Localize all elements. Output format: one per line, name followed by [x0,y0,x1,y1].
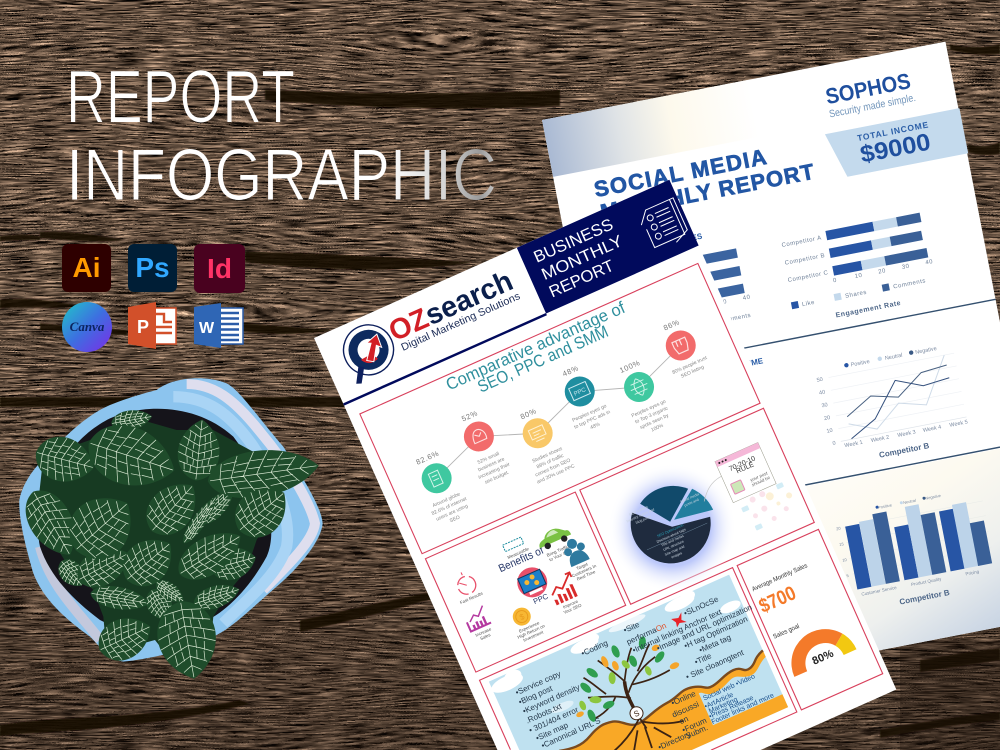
icon: car: to Your Site [548,548,571,562]
bar chart: competitor b: 10 [842,557,848,563]
blue pot [19,378,323,662]
bar chart: competitor b: Competitor B [899,588,951,607]
icon: photoshop [128,244,177,292]
stacked bar chart: competitor engagement: Comments [893,278,926,290]
step 1: SEO [449,514,461,524]
list: on page left: •Service copy [514,669,562,697]
title: report infographic: INFOGRAPHIC [66,135,497,216]
pie chart: Social media [679,492,700,504]
panel: average monthly sales: Sales goal [772,623,801,641]
foliage mass [37,417,287,667]
step 4: 48% [589,421,602,431]
step 4: 48% [561,363,580,379]
stacked bar chart: competitor engagement: 0 [833,278,838,284]
step 3: Studies shows [531,446,564,465]
stacked bar chart: competitor engagement: Like [802,300,816,308]
step 5 [611,355,676,438]
step 1: 82.6% of internet [431,496,468,517]
list: off page: Marketing [708,696,739,715]
icon: word: W [199,320,215,337]
panel: average monthly sales [737,529,883,710]
header gradient band [542,80,759,177]
step 1: 82.6% [415,449,440,467]
line chart: competitor b: 40 [819,390,826,397]
stacked bar chart: competitor engagement: 20 [878,268,887,276]
line chart: competitor b: Week 4 [922,425,942,434]
card: 70-20-10 rule: RULE [735,461,756,475]
icon: fast results: Fast Results [459,590,484,605]
logo: ozsearch [336,262,526,386]
total income panel: TOTAL INCOME [856,119,929,143]
list: on page right: •Title [693,651,713,667]
bar chart: competitor b: Positive [878,502,893,510]
stacked bar chart: competitor engagement: Competitor A [781,235,822,249]
stacked bar chart: competitor engagement: 30 [901,264,910,271]
list: on page left: •Site map [534,720,570,743]
line chart: competitor b: Neutral [884,353,903,362]
line chart: competitor b: Week 1 [844,440,863,449]
step 5: spots seen by [639,413,670,431]
pie chart: Site map and [664,545,685,557]
card: 70-20-10 rule: your post [749,470,769,483]
pie chart [602,455,742,594]
list: on page left [511,662,602,750]
pie chart: URL structure [663,539,684,552]
step 2: 52% small [477,451,500,466]
gauge: 80% [781,618,857,677]
list: off page: •Forum [681,716,708,735]
stacked bar chart: competitor engagement: Competitor C [787,270,829,284]
section heading: time: SENTIMENT OVER TIME [671,356,765,383]
list: on page left: • 301/404 error [528,705,580,735]
banner [314,180,699,406]
tree [556,624,706,750]
pot soil [38,409,271,632]
step 2: 52% [460,408,479,423]
step 1: Around globe [432,491,461,509]
list: off page [642,660,777,750]
total income panel: $9000 [858,129,933,169]
heading: Benefits of [497,544,546,575]
stacked bar chart: competitor engagement: 40 [925,259,934,266]
pie chart: SEO Optimization [656,523,684,538]
ground [556,650,788,750]
step 5: Peoples eyes go [631,399,667,419]
step 2 [452,405,514,487]
icon: improve seo: Improve [562,598,579,610]
list: on page right: •H tag Optimization [683,614,749,651]
heading: Comparative advantage of [443,298,628,394]
title: report infographic [66,54,497,216]
list: on page left: .Robots.txt [524,701,564,725]
step 5: 100% [650,423,665,433]
step 6 [653,313,711,382]
stacked bar chart: competitor engagement: Shares [845,290,868,300]
icon: car: Bring Traffic [546,543,570,558]
step 6: 80% people trust [671,355,709,376]
line chart: competitor b: Positive [850,359,870,369]
line chart: competitor b: Week 3 [897,429,916,439]
fittonia leaves [15,407,322,684]
step 3: comes from SEO [534,457,572,478]
pie chart: images [671,551,683,559]
panel: average monthly sales: Average Monthly Sales [751,562,809,593]
footer gradient [620,444,1000,694]
list: on page left: •Canonical URL S [540,716,602,750]
clouds [487,573,751,734]
line chart: competitor b: 30 [821,402,828,409]
left engagement chart: 40 [742,294,751,302]
icon: increase sales: Increase [475,626,492,638]
step 4: to top PPC ads in [573,409,612,431]
icon: target customers: Target [575,561,589,571]
icon: illustrator [62,244,111,292]
icon: improve seo: Your SEO [563,602,583,615]
heading: SEO, PPC and SMM [475,322,611,397]
list: on page right: •Image and URL optimization [655,603,753,653]
icon: powerpoint: P [137,317,149,337]
report title: SOCIAL MEDIA [592,144,769,202]
line chart: competitor b [814,342,972,469]
sophos logo: Security made simple. [828,92,917,120]
icon: target customers: Real Time [576,569,597,582]
icon: coin: High Return on [517,623,546,640]
list: on page right: •SLnOcSe [682,594,720,618]
panel: pie chart [580,408,819,614]
step 2: business are [477,456,506,473]
icon: fast results [449,568,484,605]
step 2: seo budget. [484,470,510,486]
software icons [62,244,245,352]
step 4: PPC [573,387,588,398]
icon: increase sales [463,605,496,643]
front page: business monthly report [314,180,896,750]
step 5: to Top 3 organic [634,405,670,425]
bar chart: competitor b: Product Quality [911,576,942,587]
line chart: competitor b: Week 5 [949,419,968,429]
banner: BUSINESS [531,216,616,267]
sky [489,575,788,750]
panel: seo tree [480,567,798,750]
bar chart: competitor b: Pricing [965,569,980,576]
pie chart: posts and [684,498,700,508]
step 6: 86% [662,317,681,332]
step 3: and 20% use PPC [536,463,576,485]
bar chart: competitor b [833,485,1000,616]
bar chart: competitor b: Customer Service [861,585,898,597]
icon: checklist [636,198,690,252]
stacked bar chart: competitor engagement: 10 [854,273,863,280]
list: off page: •Online [670,689,698,708]
divider [612,299,1000,517]
connector [698,476,728,501]
bar chart: competitor b: Negative [925,493,942,501]
icon: canva: Canva [70,319,105,334]
card: 70-20-10 rule [715,442,776,503]
icon: coin [507,601,548,644]
title: report infographic: REPORT [66,54,295,138]
pie chart: blog posts [635,514,652,525]
line chart: competitor b: 20 [824,415,831,422]
tree: S [632,709,641,719]
bar chart: competitor b: 15 [839,541,845,547]
icon: coin: Experience [518,620,541,634]
line chart: competitor b: 50 [816,377,823,384]
left engagement chart: Comments [718,313,752,325]
stacked bar chart: competitor engagement: Engagement Rate [835,300,901,319]
line connectors [428,345,690,478]
icon: word [194,303,243,348]
pie chart: Decision about tags [656,527,687,544]
list: on page left: •Keyword density [521,683,581,716]
bar chart: competitor b: Neutral [903,498,916,505]
step 4 [551,359,614,437]
panel: average monthly sales: $700 [756,582,800,618]
list: off page: Subm. [684,723,709,741]
list: on page right [578,575,769,717]
page sheet [314,180,896,750]
list: off page: on [678,714,690,726]
logo: ozsearch: OZsearch [384,265,518,348]
icon: canva [62,302,112,352]
banner: MONTHLY [539,232,626,284]
pie chart: Title and metas [660,534,685,548]
list: off page: Footer links and more [711,692,775,726]
stacked bar chart: competitor engagement [779,212,941,327]
logo: ozsearch: Digital Marketing Solutions [399,290,522,354]
report title: MONTHLY REPORT [598,159,817,225]
step 2: increasing their [478,461,511,481]
step 1 [408,446,474,530]
icon: coin: Investment [522,629,545,643]
bar chart: competitor b: 0 [849,588,853,594]
gauge: 80%: 80% [810,648,836,668]
icon: improve seo [547,572,584,616]
step 3: 89% of traffic [536,453,565,470]
panel: benefits of ppc [425,492,626,672]
icon: target customers [558,534,600,583]
back page: social media monthly report [542,41,1000,694]
pie chart: Industry topics and [626,508,655,524]
list: on page right: •Site [622,620,641,635]
line chart: competitor b: Competitor B [878,441,930,460]
line chart: competitor b: Week 2 [870,435,890,444]
panel: comparative advantage [360,263,760,554]
list: off page: discussi [671,700,700,719]
step 3: 80% [519,406,538,421]
step 3 [508,401,576,485]
line chart: competitor b: Negative [915,346,937,356]
list: off page: •ArtArticle [704,692,735,711]
pie chart: SEO content [628,505,649,517]
list: on page right: •Internal linking Anchor text [631,607,724,655]
potted plant [15,378,323,684]
card: 70-20-10 rule: should be [751,475,771,487]
icon: increase sales: Sales [479,632,492,641]
step 1: users are using [435,503,469,523]
sophos logo: SOPHOS [823,68,913,109]
card: 70-20-10 rule: 70-20-10 [728,455,757,473]
bar chart: competitor b: 20 [836,525,842,531]
icon: car [535,523,578,564]
bar chart: competitor b: 5 [846,573,850,578]
list: on page right: •Meta tag [698,633,732,655]
icon: monitor: PPC [532,591,550,606]
step 4: Peoples eyes go [571,403,608,424]
left engagement chart: ENGAGEMENT RATES [617,232,704,257]
list: on page right: • Site cloaongtent [684,648,746,682]
icon: measurable: Measurable [507,546,530,560]
list: off page: •Press Release [708,695,755,721]
icon: monitor [512,563,555,609]
step 6: SEO listing [680,364,705,380]
icon: measurable [502,536,530,560]
total income panel [825,108,968,179]
list: off page: Social web •Video [702,673,756,702]
list: on page left: •Blog post [517,683,555,707]
stacked bar chart: competitor engagement: Competitor B [784,253,826,267]
left engagement chart [617,225,755,341]
list: on page right: performaOn [625,621,668,647]
left engagement chart: 0 [723,299,728,306]
icon: target customers: Customers In [571,563,597,578]
icon: photoshop: Ps [135,252,170,283]
pie glow [588,443,757,612]
line chart: competitor b: 10 [826,428,833,435]
banner: REPORT [546,257,617,301]
icon: indesign [194,244,245,293]
icon: indesign: Id [207,253,232,284]
line chart: competitor b: 0 [832,440,836,447]
faded social icons [738,480,800,533]
icon: coin: $ [518,612,526,622]
icon: powerpoint [128,302,176,349]
icon: illustrator: Ai [72,252,100,283]
step 5: 100% [618,358,642,375]
page sheet [542,42,1000,694]
list: on page right: •Coding [580,638,609,658]
